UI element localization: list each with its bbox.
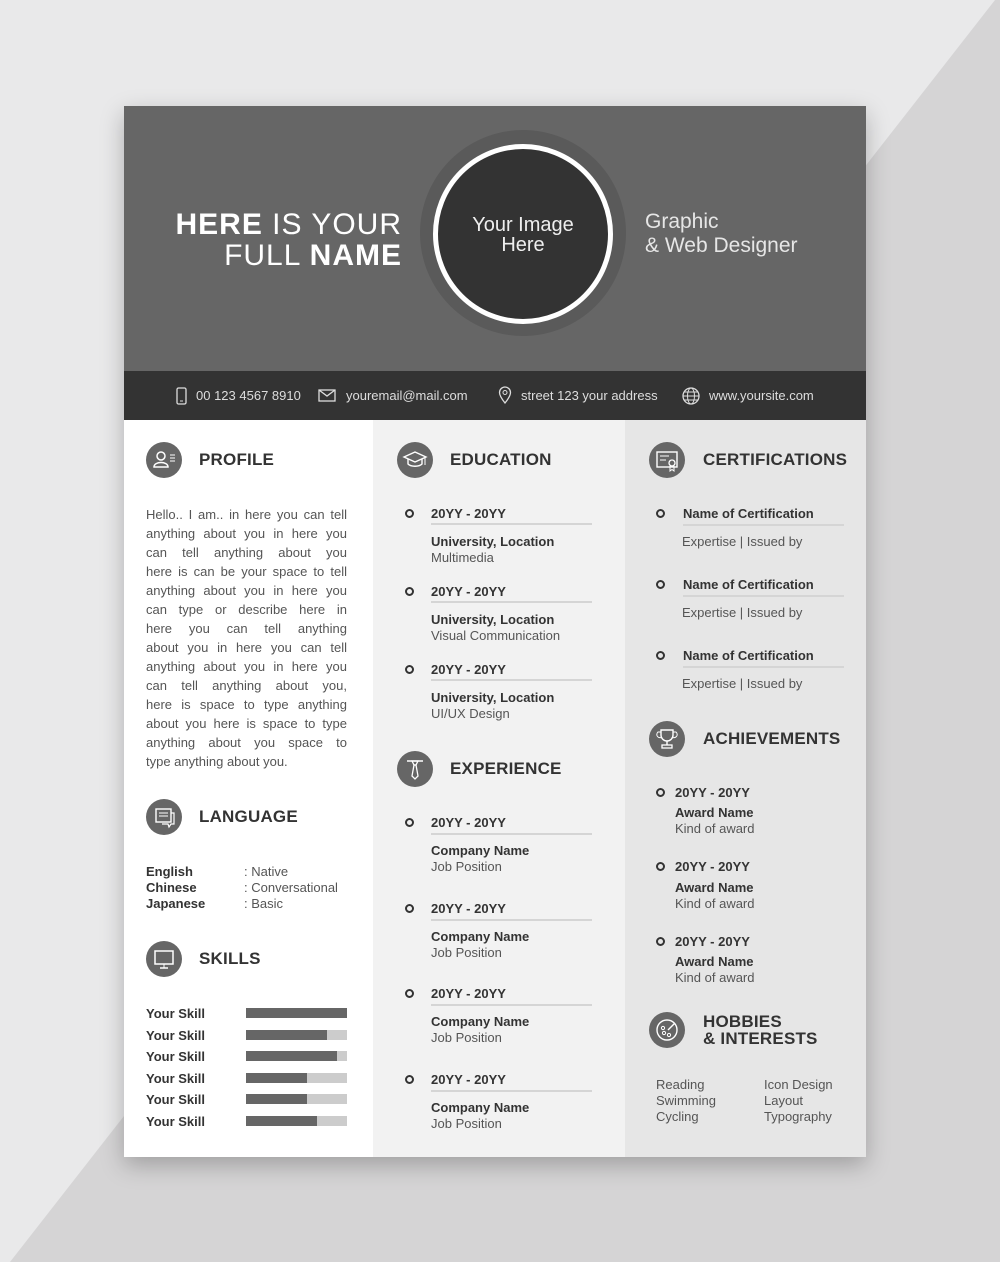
education entries xyxy=(405,509,414,518)
icon: experience xyxy=(397,751,433,787)
panel: experience: 20YY - 20YY xyxy=(431,815,506,830)
photo placeholder text: Here xyxy=(501,234,545,256)
icon: phone xyxy=(176,387,187,405)
heading: profile: PROFILE xyxy=(199,450,274,469)
panel: experience: 20YY - 20YY xyxy=(431,986,506,1001)
panel: achievements: Award Name xyxy=(675,880,754,895)
photo placeholder text: Your Image xyxy=(472,214,574,236)
skill bars: Your Skill xyxy=(146,1092,205,1107)
heading: hobbies: & INTERESTS xyxy=(703,1029,818,1048)
panel: achievements: Kind of award xyxy=(675,821,754,836)
panel: hobbies xyxy=(649,1012,833,1124)
panel: certifications: Name of Certification xyxy=(683,506,814,521)
skill bars: Your Skill xyxy=(146,1070,205,1086)
panel: education xyxy=(397,442,592,721)
job title: & Web Designer xyxy=(645,234,798,257)
icon: mail xyxy=(318,389,336,402)
icon: hobbies xyxy=(649,1012,685,1048)
hobbies list xyxy=(656,1077,716,1124)
header xyxy=(124,106,866,371)
icon: profile xyxy=(146,442,182,478)
column: middle background xyxy=(373,420,625,1157)
profile text xyxy=(146,507,347,769)
panel: profile xyxy=(146,442,347,769)
certification entries xyxy=(656,509,665,518)
heading: certifications: CERTIFICATIONS xyxy=(703,450,847,469)
panel: language: Japanese xyxy=(146,896,205,911)
icon: pin xyxy=(498,386,512,404)
skill bars: Your Skill xyxy=(146,1028,205,1042)
profile text: about you here is space to type xyxy=(146,716,347,731)
panel: experience: Company Name xyxy=(431,843,529,858)
name: HERE IS YOUR xyxy=(175,208,402,241)
profile text: here you can tell anything xyxy=(146,621,347,636)
panel: experience: Company Name xyxy=(431,929,529,944)
icon: language xyxy=(146,799,182,835)
panel: certifications xyxy=(649,442,847,691)
panel: education: Visual Communication xyxy=(431,628,560,643)
panel: experience: Company Name xyxy=(431,1014,529,1029)
panel: experience: Job Position xyxy=(431,1116,502,1131)
panel: certifications: Name of Certification xyxy=(683,648,814,663)
profile text: anything about you in here you xyxy=(146,583,347,598)
contact bar: youremail@mail.com xyxy=(346,388,468,403)
skill bars: Your Skill xyxy=(146,1114,205,1128)
panel: skills xyxy=(146,941,261,977)
panel: education: University, Location xyxy=(431,612,554,627)
heading: achievements: ACHIEVEMENTS xyxy=(703,729,840,748)
icon: skills xyxy=(146,941,182,977)
skill bars: Your Skill xyxy=(146,1049,205,1064)
icon: education xyxy=(397,442,433,478)
panel: language: : Native xyxy=(244,864,288,879)
icon: globe xyxy=(682,387,700,405)
panel: achievements: Award Name xyxy=(675,954,754,969)
panel: experience xyxy=(397,751,592,1131)
contact bar: 00 123 4567 8910 xyxy=(196,388,301,403)
panel: hobbies: Layout xyxy=(764,1093,803,1108)
profile text: can tell anything about you, xyxy=(146,678,347,693)
panel: education: UI/UX Design xyxy=(431,706,510,721)
panel: achievements: 20YY - 20YY xyxy=(675,785,750,800)
panel: achievements xyxy=(649,721,840,985)
page xyxy=(124,106,866,1157)
panel: achievements: Kind of award xyxy=(675,896,754,911)
panel: education: 20YY - 20YY xyxy=(431,662,506,677)
profile text: about you in here you can tell xyxy=(146,640,347,655)
panel: achievements: 20YY - 20YY xyxy=(675,934,750,949)
panel: language: Chinese xyxy=(146,880,197,895)
profile text: anything about you in here you xyxy=(146,526,347,541)
column: right background xyxy=(625,420,866,1157)
panel: language xyxy=(146,799,338,911)
heading: education: EDUCATION xyxy=(450,450,552,469)
profile text: Hello.. I am.. in here you can tell xyxy=(146,507,347,522)
panel: experience: Company Name xyxy=(431,1100,529,1115)
icon: trophy xyxy=(649,721,685,757)
name: FULL NAME xyxy=(224,239,402,272)
panel: hobbies: Icon Design xyxy=(764,1077,833,1092)
job title xyxy=(645,210,798,257)
heading: hobbies xyxy=(703,1012,818,1048)
experience entries xyxy=(405,818,414,827)
panel: education: 20YY - 20YY xyxy=(431,584,506,599)
panel: certifications: Expertise | Issued by xyxy=(682,605,802,620)
panel: achievements: Award Name xyxy=(675,805,754,820)
heading: hobbies: HOBBIES xyxy=(703,1012,782,1031)
profile text: can tell anything about you xyxy=(146,545,347,560)
contact bar: www.yoursite.com xyxy=(709,388,814,403)
hobbies list: Swimming xyxy=(656,1093,716,1108)
job title: Graphic xyxy=(645,210,719,233)
panel: certifications: Expertise | Issued by xyxy=(682,534,802,549)
panel: hobbies: Typography xyxy=(764,1109,832,1124)
skill bars: Your Skill xyxy=(146,1006,205,1021)
photo circle xyxy=(420,130,626,336)
heading: language: LANGUAGE xyxy=(199,807,298,826)
heading: experience: EXPERIENCE xyxy=(450,759,562,778)
contact bar xyxy=(124,371,866,420)
skill bars xyxy=(146,1006,347,1128)
panel: certifications: Name of Certification xyxy=(683,577,814,592)
profile text: type anything about you. xyxy=(146,754,288,769)
panel: education: University, Location xyxy=(431,690,554,705)
profile text: anything about you space to xyxy=(146,735,347,750)
profile text: here is can be your space to tell xyxy=(146,564,347,579)
name xyxy=(175,208,402,272)
profile text: can type or describe here in xyxy=(146,602,347,617)
panel: experience: 20YY - 20YY xyxy=(431,1072,506,1087)
photo placeholder text xyxy=(472,214,574,256)
panel: language: : Basic xyxy=(244,896,283,911)
panel: achievements: Kind of award xyxy=(675,970,754,985)
panel: experience: 20YY - 20YY xyxy=(431,901,506,916)
profile text: anything about you in here you xyxy=(146,659,347,674)
panel: experience: Job Position xyxy=(431,945,502,960)
achievement entries xyxy=(656,788,665,797)
panel: language: : Conversational xyxy=(244,880,338,895)
contact bar: street 123 your address xyxy=(521,388,658,403)
hobbies list: Reading xyxy=(656,1077,704,1092)
icon: certificate xyxy=(649,442,685,478)
panel: experience: Job Position xyxy=(431,1030,502,1045)
panel: certifications: Expertise | Issued by xyxy=(682,676,802,691)
panel: experience: Job Position xyxy=(431,859,502,874)
hobbies list: Cycling xyxy=(656,1109,699,1124)
heading: skills: SKILLS xyxy=(199,949,261,968)
panel: achievements: 20YY - 20YY xyxy=(675,859,750,874)
profile text: here is space to type anything xyxy=(146,697,347,712)
panel: education: University, Location xyxy=(431,534,554,549)
panel: education: Multimedia xyxy=(431,550,494,565)
panel: education: 20YY - 20YY xyxy=(431,506,506,521)
language list: English xyxy=(146,864,193,879)
